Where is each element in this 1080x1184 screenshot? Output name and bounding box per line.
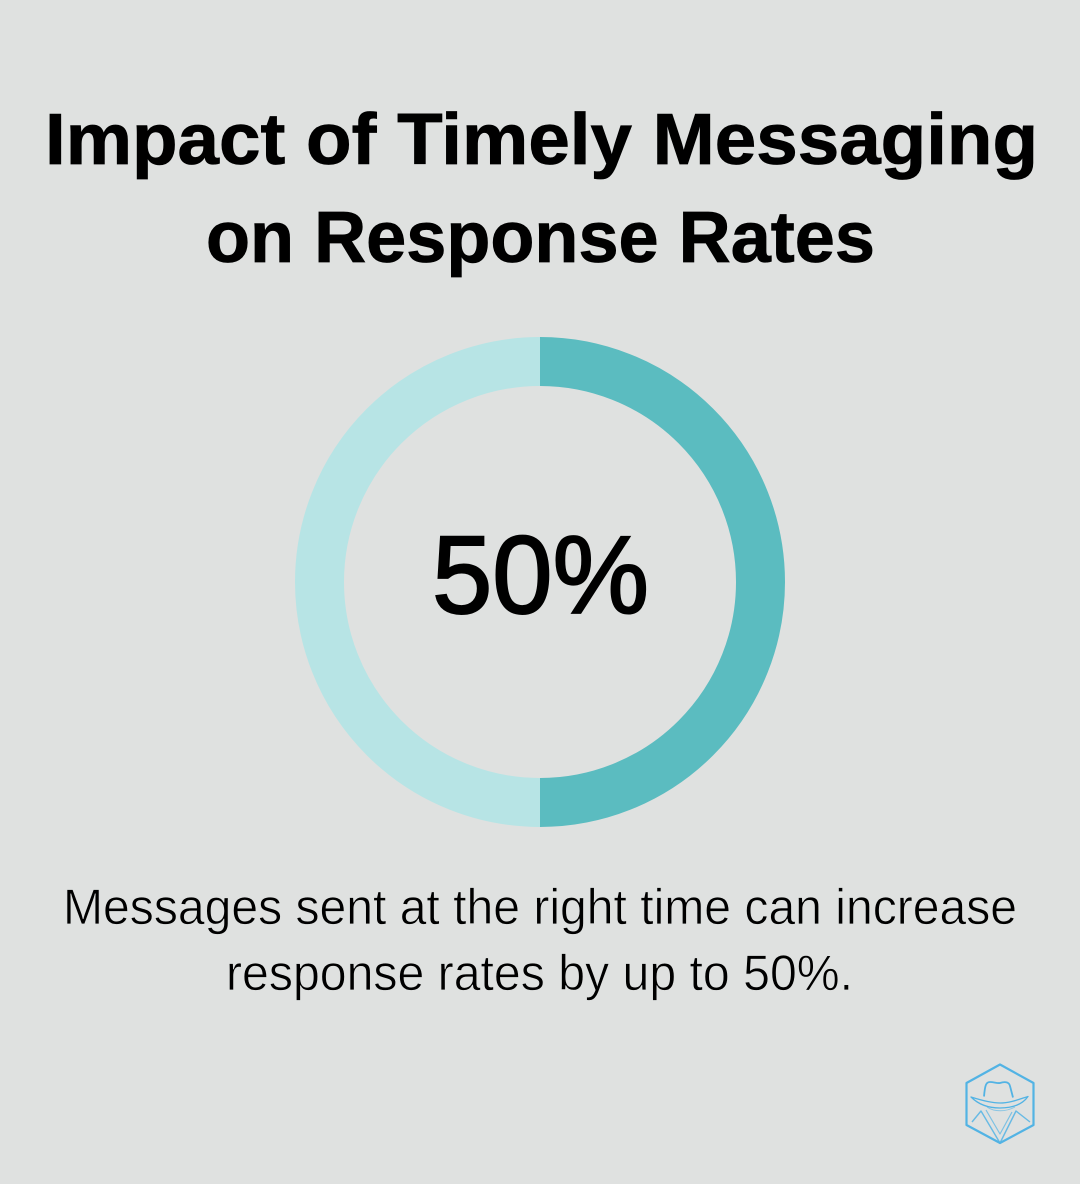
title: on Response Rates [206, 198, 875, 278]
icon: hexagon logo with hat [966, 1064, 1034, 1143]
hat brim [971, 1096, 1028, 1108]
description text: response rates by up to 50%. [226, 945, 853, 1001]
description text [63, 879, 1017, 1001]
remaining segment [320, 362, 540, 802]
title: Impact of Timely Messaging [45, 100, 1038, 180]
hexagon outline [966, 1064, 1034, 1143]
center value: 50% [432, 514, 649, 637]
donut chart: 50% [320, 362, 760, 802]
hat crown [984, 1082, 1013, 1098]
highlighted 50% segment [540, 362, 760, 802]
coat lapels [972, 1111, 1030, 1143]
title [45, 100, 1038, 278]
face shadow [987, 1107, 1015, 1111]
description text: Messages sent at the right time can increase [63, 879, 1017, 935]
